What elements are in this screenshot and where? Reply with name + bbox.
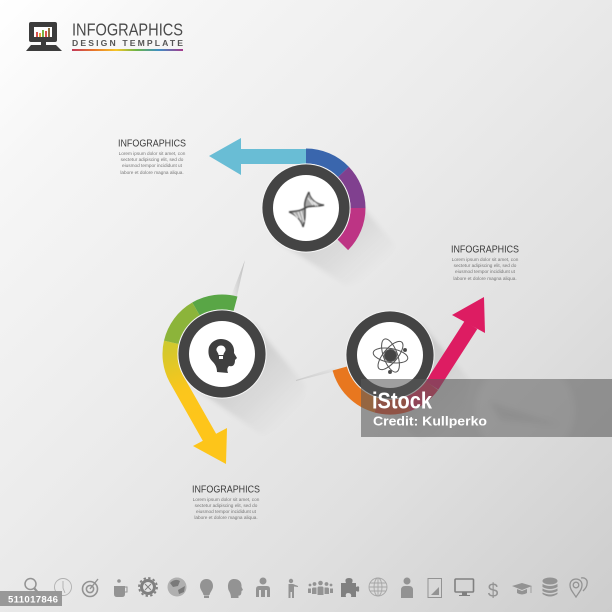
icon: dollar sign: $ xyxy=(488,581,499,602)
arc segments xyxy=(340,368,432,407)
header: monitor icon and title xyxy=(26,20,183,51)
image ID tag xyxy=(0,591,62,606)
icon: head xyxy=(228,579,243,598)
text block: step 2 xyxy=(192,484,260,520)
node ring xyxy=(345,310,435,400)
text block: step 1: labore et dolore magna aliqua. xyxy=(120,170,184,175)
icon: DNA helix xyxy=(289,192,324,227)
text block: step 3: Lorem ipsum dolor sit amet, con xyxy=(452,257,519,262)
text block: step 2: Lorem ipsum dolor sit amet, con xyxy=(193,497,260,502)
background fold creases xyxy=(231,260,336,381)
icon: tablet with chart xyxy=(428,578,442,598)
icon: puzzle piece xyxy=(341,578,359,597)
text block: step 1: sectetur adipiscing elit, sed do xyxy=(121,157,184,162)
text block: step 3: INFOGRAPHICS xyxy=(451,244,519,256)
icon: head with light bulb xyxy=(208,339,237,373)
band texture xyxy=(475,360,575,460)
step 2: head node with yellow arrow xyxy=(170,302,267,464)
rainbow underline xyxy=(72,49,183,51)
icon: wireframe globe xyxy=(369,578,387,596)
icon: target xyxy=(82,579,98,596)
title: INFOGRAPHICS xyxy=(72,20,183,40)
icon: team xyxy=(308,581,333,595)
icon: monitor with bar chart xyxy=(26,22,62,51)
icon: atom xyxy=(372,337,409,374)
long shadows xyxy=(191,177,470,440)
step 1: DNA node with blue arrow xyxy=(209,138,358,253)
icon: graduation cap xyxy=(512,583,532,594)
text block: step 1 xyxy=(118,138,186,175)
text block: step 1: Lorem ipsum dolor sit amet, con xyxy=(119,151,186,156)
image ID tag: 511017846 xyxy=(8,594,58,606)
watermark band xyxy=(361,379,612,437)
node ring xyxy=(177,309,267,399)
icon: person xyxy=(401,578,413,598)
subtitle: DESIGN TEMPLATE xyxy=(72,38,183,48)
text block: step 2: sectetur adipiscing elit, sed do xyxy=(195,503,258,508)
icon: coffee cup xyxy=(114,579,127,597)
arc segments xyxy=(171,302,236,342)
icon row xyxy=(25,578,587,602)
watermark brand: iStock xyxy=(372,388,432,414)
icon: search xyxy=(25,578,40,595)
text block: step 1: INFOGRAPHICS xyxy=(118,138,186,150)
text block: step 1: eiusmod tempor incididunt ut xyxy=(122,163,183,168)
icon: gear xyxy=(139,578,157,596)
text block: step 3: labore et dolore magna aliqua. xyxy=(453,276,517,281)
icon: light bulb xyxy=(200,579,213,598)
step 3: atom node with pink arrow xyxy=(340,297,485,407)
icon: clock xyxy=(54,578,72,596)
icon: coin stack xyxy=(542,578,558,596)
arc segments xyxy=(306,156,358,245)
arrow: light blue pointing left xyxy=(209,138,306,175)
watermark credit: Credit: Kullperko xyxy=(373,414,487,428)
icon: desktop monitor xyxy=(455,579,474,596)
icon: businessperson xyxy=(256,578,270,597)
icon: man pointing xyxy=(288,579,298,598)
text block: step 2: labore et dolore magna aliqua. xyxy=(194,515,258,520)
icon: globe xyxy=(168,578,186,596)
text block: step 2: INFOGRAPHICS xyxy=(192,484,260,496)
text block: step 3 xyxy=(451,244,519,281)
text block: step 3: eiusmod tempor incididunt ut xyxy=(455,269,516,274)
text block: step 3: sectetur adipiscing elit, sed do xyxy=(454,263,517,268)
icon: map pins xyxy=(570,578,587,597)
arrow: yellow pointing down xyxy=(170,342,227,464)
text block: step 2: eiusmod tempor incididunt ut xyxy=(196,509,257,514)
node ring xyxy=(261,163,351,253)
arrow: pink pointing up-right xyxy=(432,297,485,386)
